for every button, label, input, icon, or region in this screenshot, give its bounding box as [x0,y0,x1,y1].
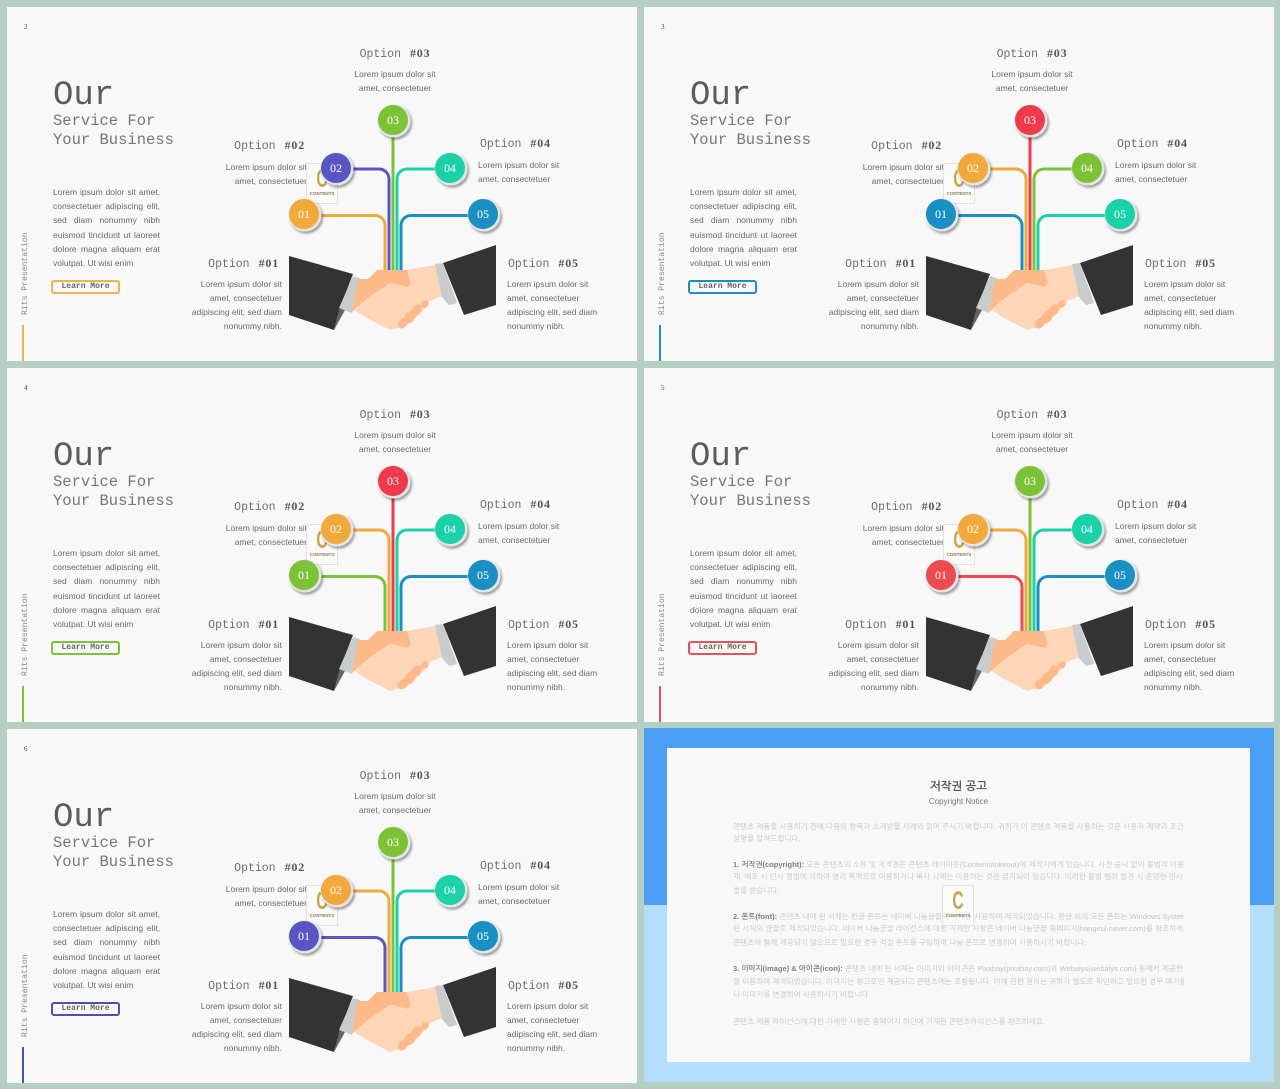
diagram: handshake with numbered branches [926,104,1140,330]
option 5 text: amet, consectetuer [1144,654,1216,664]
option 4 text: Option #04 [1117,497,1188,512]
option 3 text [991,407,1073,454]
heading [53,77,174,149]
option 2 text: Lorem ipsum dolor sit [226,884,307,894]
heading: Your Business [53,853,174,871]
option 3 text [354,768,436,815]
intro text: 나 이미지를 변경하여 사용하시기 바랍니다. [733,990,870,999]
diagram: handshake with numbered branches: 01 [298,929,310,943]
option 5 text [1144,617,1234,692]
option 1 text [192,256,282,331]
option 5 text: Option #05 [508,617,579,632]
option 1 text: Option #01 [845,617,916,632]
option 1 text: adipiscing elit, sed diam [829,307,919,317]
body text: Lorem ipsum dolor sit amet, [690,548,797,558]
diagram: handshake with numbered branches [288,826,504,1052]
body text: consectetuer adipiscing elit, [53,201,160,211]
intro text: 벌을 받습니다. [733,886,779,895]
option 1 text: Lorem ipsum dolor sit [201,640,282,650]
option 3 text: Lorem ipsum dolor sit [354,791,436,801]
diagram: handshake with numbered branches: 05 [1114,207,1126,221]
option 4 text: Lorem ipsum dolor sit [478,882,559,892]
option 1 text: nonummy nibh. [224,682,282,692]
notice title: 저작권 공고 [930,781,987,793]
option 1 text: Lorem ipsum dolor sit [201,279,282,289]
heading: Our [53,438,114,476]
option 1 text: adipiscing elit, sed diam [192,668,282,678]
option 1 text: nonummy nibh. [224,321,282,331]
option 1 text [829,617,919,692]
watermark logo: CONTENTS [947,191,971,196]
option 2 text [863,499,944,547]
body text: volutpat. Ut wisi enim [53,619,133,629]
heading: Our [53,799,114,837]
body text [53,187,160,268]
option 4 text: Lorem ipsum dolor sit [478,521,559,531]
diagram: handshake with numbered branches: 02 [967,161,979,175]
option 3 text [354,407,436,454]
diagram: handshake with numbered branches [926,466,1140,691]
option 2 text: Option #02 [234,138,305,153]
panel: slide 4 [7,368,637,722]
option 1 text: nonummy nibh. [224,1043,282,1053]
body text: Lorem ipsum dolor sit amet, [53,187,160,197]
diagram: handshake with numbered branches: 04 [444,522,456,536]
option 1 text [829,256,919,331]
option 5 text: amet, consectetuer [507,1015,579,1025]
button: Learn More [61,643,110,652]
option 2 text: amet, consectetuer [235,176,307,186]
option 1 text [192,978,282,1053]
diagram: handshake with numbered branches: 01 [298,207,310,221]
option 1 text: adipiscing elit, sed diam [192,307,282,317]
option 2 text [226,499,307,547]
option 1 text: Option #01 [845,256,916,271]
watermark logo: C [953,165,965,193]
option 4 text: amet, consectetuer [478,896,550,906]
option 1 text: nonummy nibh. [861,682,919,692]
body text: Lorem ipsum dolor sit amet, [53,548,160,558]
intro text: 콘텐츠의 함께 제공되지 않으므로 필요한 경우 적절 폰트를 구입하여 나눔 폰트로 변경하여 사용하시기 바랍니다. [733,938,1086,947]
watermark logo: CONTENTS [310,191,334,196]
body text: dolore magna aliquam erat [690,605,797,615]
option 5 text: nonummy nibh. [507,1043,565,1053]
option 5 text [507,978,597,1053]
body text: euismod tincidunt ut laoreet [53,591,160,601]
option 5 text: nonummy nibh. [1144,682,1202,692]
diagram: handshake with numbered branches: 02 [330,161,342,175]
option 5 text: Lorem ipsum dolor sit [1144,279,1225,289]
heading: Service For [690,473,792,491]
body text: dolore magna aliquam erat [53,605,160,615]
watermark logo: CONTENTS [947,552,971,557]
heading [53,438,174,510]
option 3 text: Option #03 [360,46,430,61]
diagram: handshake with numbered branches: 03 [1024,474,1036,488]
option 5 text: amet, consectetuer [1144,293,1216,303]
body text [53,909,160,990]
panel: copyright notice [644,728,1274,1082]
accent bar [22,325,24,361]
body text [690,548,797,629]
heading [690,438,811,510]
diagram: handshake with numbered branches: 05 [477,929,489,943]
button [688,280,757,294]
panel: slide 5 [644,368,1274,722]
body text: volutpat. Ut wisi enim [53,980,133,990]
option 2 text: Option #02 [234,499,305,514]
watermark logo: CONTENTS [946,913,970,918]
heading: Service For [53,112,155,130]
diagram: handshake with numbered branches: 05 [477,207,489,221]
diagram: handshake with numbered branches: 01 [298,568,310,582]
body text: euismod tincidunt ut laoreet [53,952,160,962]
notice subtitle: Copyright Notice [929,797,988,806]
option 4 text: Option #04 [1117,136,1188,151]
intro text: 콘텐츠 제품 라이선스에 대한 자세한 사항은 홈페이지 하단에 기재된 콘텐츠라이선스를 참조하세요. [733,1017,1045,1026]
option 4 text: Option #04 [480,858,551,873]
watermark logo [306,524,338,565]
button: Learn More [698,282,746,291]
option 2 text: Lorem ipsum dolor sit [226,523,307,533]
heading: Service For [53,834,155,852]
diagram: handshake with numbered branches [288,466,504,691]
option 3 text: amet, consectetuer [359,444,431,454]
option 4 text: amet, consectetuer [478,174,550,184]
diagram: handshake with numbered branches: 04 [444,883,456,897]
body text: volutpat. Ut wisi enim [690,619,770,629]
option 5 text: adipiscing elit, sed diam [507,668,597,678]
option 4 text [478,136,560,184]
option 4 text: Option #04 [480,136,551,151]
option 1 text: amet, consectetuer [847,654,919,664]
diagram: handshake with numbered branches: 01 [935,568,947,582]
page number: 4 [24,384,28,392]
body text [53,548,160,629]
intro text [667,749,1250,1062]
option 3 text: Lorem ipsum dolor sit [354,430,436,440]
button: Learn More [61,282,110,291]
option 2 text: amet, consectetuer [872,176,944,186]
body text: sed diam nonummy nibh [53,215,160,225]
option 2 text: amet, consectetuer [235,537,307,547]
blue header band [644,728,1274,905]
option 1 text: adipiscing elit, sed diam [192,1029,282,1039]
body text: sed diam nonummy nibh [690,576,797,586]
option 3 text [354,46,436,93]
body text: euismod tincidunt ut laoreet [53,230,160,240]
option 1 text: Lorem ipsum dolor sit [201,1001,282,1011]
body text: sed diam nonummy nibh [53,576,160,586]
side label: Rits Presentation [21,954,30,1037]
option 5 text: adipiscing elit, sed diam [507,1029,597,1039]
option 4 text: amet, consectetuer [1115,535,1187,545]
body text: dolore magna aliquam erat [53,966,160,976]
option 5 text: Lorem ipsum dolor sit [507,640,588,650]
body text: consectetuer adipiscing elit, [690,201,797,211]
option 1 text: adipiscing elit, sed diam [829,668,919,678]
watermark logo [943,163,975,204]
diagram: handshake with numbered branches: 04 [444,161,456,175]
option 4 text [1115,497,1196,545]
side label: Rits Presentation [21,232,30,315]
option 5 text: adipiscing elit, sed diam [1144,668,1234,678]
accent bar [22,1047,24,1083]
body text: volutpat. Ut wisi enim [53,258,133,268]
option 3 text: Option #03 [997,407,1067,422]
heading: Your Business [53,492,174,510]
button: Learn More [61,1004,110,1013]
watermark logo [306,885,338,926]
body text: dolore magna aliquam erat [690,244,797,254]
button [51,1002,120,1016]
body text [690,187,797,268]
accent bar [659,325,661,361]
diagram: handshake with numbered branches: 03 [387,474,399,488]
option 3 text: Lorem ipsum dolor sit [991,430,1073,440]
heading: Our [690,438,751,476]
heading: Your Business [690,131,811,149]
watermark logo: CONTENTS [310,552,334,557]
option 5 text [507,617,597,692]
body text: sed diam nonummy nibh [53,937,160,947]
option 5 text: Lorem ipsum dolor sit [507,279,588,289]
panel: slide 2 [7,7,637,361]
button [688,641,757,655]
option 5 text: Option #05 [1145,256,1216,271]
option 5 text [507,256,597,331]
heading: Your Business [53,131,174,149]
option 5 text: Lorem ipsum dolor sit [507,1001,588,1011]
heading: Your Business [690,492,811,510]
option 1 text: amet, consectetuer [210,1015,282,1025]
option 3 text: Option #03 [360,768,430,783]
page number: 5 [661,384,664,392]
option 3 text: Lorem ipsum dolor sit [991,69,1073,79]
option 4 text: amet, consectetuer [478,535,550,545]
watermark logo: C [952,887,964,915]
option 2 text [226,860,307,908]
watermark logo: CONTENTS [310,913,334,918]
option 5 text: adipiscing elit, sed diam [507,307,597,317]
option 3 text [991,46,1073,93]
option 1 text: amet, consectetuer [210,654,282,664]
option 2 text: Lorem ipsum dolor sit [863,162,944,172]
intro text: 성명을 알려드립니다. [733,834,801,843]
body text: dolore magna aliquam erat [53,244,160,254]
diagram: handshake with numbered branches: 03 [387,835,399,849]
diagram: handshake with numbered branches: 01 [935,207,947,221]
option 5 text: amet, consectetuer [507,293,579,303]
option 1 text: amet, consectetuer [847,293,919,303]
watermark logo [306,163,338,204]
option 5 text: nonummy nibh. [507,682,565,692]
option 5 text: Option #05 [508,978,579,993]
diagram: handshake with numbered branches: 03 [1024,113,1036,127]
option 2 text: Option #02 [871,499,942,514]
heading [690,77,811,149]
option 5 text: Option #05 [1145,617,1216,632]
option 5 text: Option #05 [508,256,579,271]
body text: Lorem ipsum dolor sit amet, [690,187,797,197]
panel: slide 6 [7,729,637,1083]
option 4 text [1115,136,1196,184]
button [51,641,120,655]
accent bar [22,686,24,722]
diagram: handshake with numbered branches: 05 [1114,568,1126,582]
watermark logo [943,524,975,565]
option 5 text: amet, consectetuer [507,654,579,664]
body text: euismod tincidunt ut laoreet [690,591,797,601]
watermark logo: C [953,526,965,554]
diagram: handshake with numbered branches: 05 [477,568,489,582]
option 3 text: amet, consectetuer [996,83,1068,93]
option 3 text: amet, consectetuer [996,444,1068,454]
body text: consectetuer adipiscing elit, [53,923,160,933]
side label: Rits Presentation [21,593,30,676]
option 5 text: Lorem ipsum dolor sit [1144,640,1225,650]
body text: volutpat. Ut wisi enim [690,258,770,268]
option 4 text: Lorem ipsum dolor sit [478,160,559,170]
watermark logo: C [316,165,328,193]
option 1 text: Option #01 [208,617,279,632]
page number: 2 [24,23,28,31]
watermark logo [942,885,974,926]
option 5 text [1144,256,1234,331]
watermark logo: C [316,526,328,554]
heading: Service For [53,473,155,491]
diagram: handshake with numbered branches [288,104,504,330]
body text: Lorem ipsum dolor sit amet, [53,909,160,919]
option 4 text: Option #04 [480,497,551,512]
body text: euismod tincidunt ut laoreet [690,230,797,240]
option 1 text: nonummy nibh. [861,321,919,331]
page number: 6 [24,745,28,753]
option 1 text: Option #01 [208,256,279,271]
option 4 text [478,858,560,906]
option 1 text: Lorem ipsum dolor sit [838,640,919,650]
option 3 text: Lorem ipsum dolor sit [354,69,436,79]
button: Learn More [698,643,746,652]
diagram: handshake with numbered branches: 04 [1081,522,1093,536]
button [51,280,120,294]
page number: 3 [661,23,664,31]
accent bar [659,686,661,722]
heading [53,799,174,871]
body text: consectetuer adipiscing elit, [690,562,797,572]
option 4 text [478,497,560,545]
option 4 text: Lorem ipsum dolor sit [1115,160,1196,170]
diagram: handshake with numbered branches: 03 [387,113,399,127]
option 3 text: amet, consectetuer [359,83,431,93]
body text: sed diam nonummy nibh [690,215,797,225]
option 2 text [226,138,307,186]
option 3 text: Option #03 [997,46,1067,61]
heading: Our [690,77,751,115]
heading: Service For [690,112,792,130]
heading: Our [53,77,114,115]
option 5 text: nonummy nibh. [507,321,565,331]
option 5 text: nonummy nibh. [1144,321,1202,331]
body text: consectetuer adipiscing elit, [53,562,160,572]
notice card [667,748,1250,1062]
option 2 text: Option #02 [234,860,305,875]
option 1 text: Option #01 [208,978,279,993]
option 2 text: Lorem ipsum dolor sit [226,162,307,172]
option 3 text: amet, consectetuer [359,805,431,815]
diagram: handshake with numbered branches: 02 [330,883,342,897]
diagram: handshake with numbered branches: 02 [330,522,342,536]
option 3 text: Option #03 [360,407,430,422]
option 2 text: amet, consectetuer [872,537,944,547]
option 4 text: amet, consectetuer [1115,174,1187,184]
option 5 text: adipiscing elit, sed diam [1144,307,1234,317]
watermark logo: C [316,887,328,915]
option 1 text [192,617,282,692]
option 4 text: Lorem ipsum dolor sit [1115,521,1196,531]
diagram: handshake with numbered branches: 04 [1081,161,1093,175]
option 2 text: Option #02 [871,138,942,153]
side label: Rits Presentation [658,232,667,315]
side label: Rits Presentation [658,593,667,676]
option 1 text: amet, consectetuer [210,293,282,303]
option 2 text: Lorem ipsum dolor sit [863,523,944,533]
option 2 text [863,138,944,186]
diagram: handshake with numbered branches: 02 [967,522,979,536]
panel: slide 3 [644,7,1274,361]
option 2 text: amet, consectetuer [235,898,307,908]
option 1 text: Lorem ipsum dolor sit [838,279,919,289]
